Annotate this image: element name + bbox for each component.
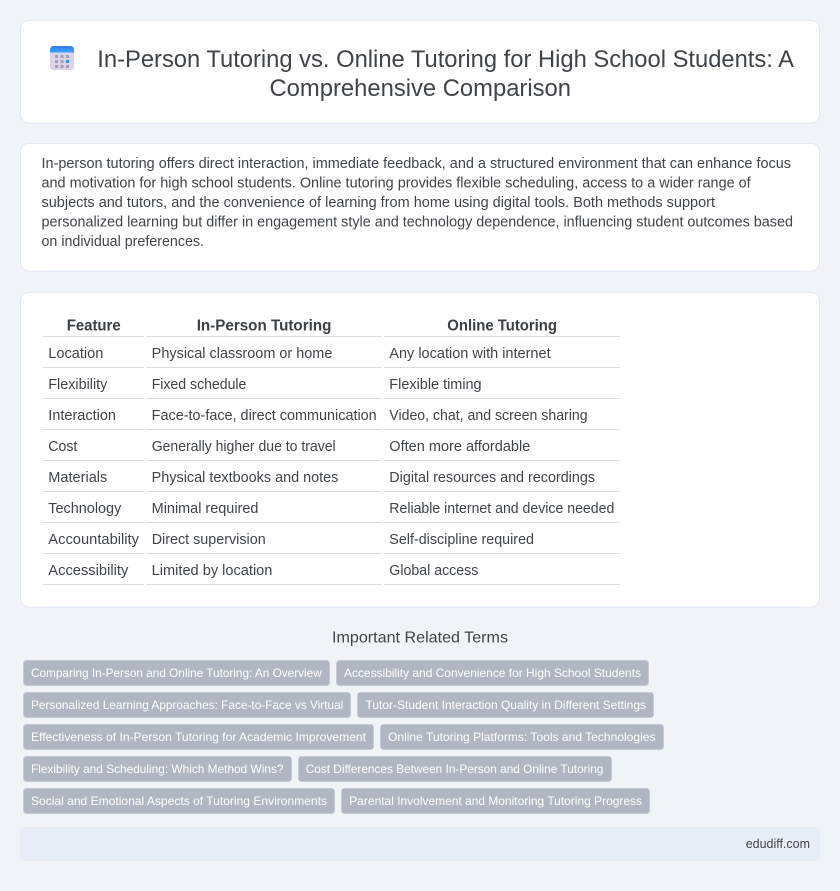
row: accountability: Self-discipline required — [389, 532, 534, 548]
row: materials — [48, 470, 595, 486]
panel: title header — [20, 20, 820, 123]
tag — [24, 660, 330, 686]
row: accessibility: Limited by location — [152, 563, 272, 579]
row: accountability — [48, 532, 534, 548]
title — [97, 46, 794, 102]
row: interaction: Interaction — [48, 408, 116, 424]
row: interaction: Video, chat, and screen sharing — [389, 408, 588, 424]
tag — [380, 724, 664, 750]
footer: edudiff.com — [746, 836, 810, 851]
row: interaction — [48, 408, 588, 424]
tag: Social and Emotional Aspects of Tutoring Environments — [31, 794, 327, 808]
tag: Effectiveness of In-Person Tutoring for Academic Improvement — [31, 730, 367, 744]
icon: calendar — [50, 46, 74, 70]
row: materials: Materials — [48, 470, 107, 486]
text block: introduction paragraph: and motivation for high school students. Online tutoring provides flexible scheduling, access to a wider range of — [42, 176, 752, 192]
tag: Comparing In-Person and Online Tutoring: An Overview — [31, 666, 322, 680]
tag: Tutor-Student Interaction Quality in Different Settings — [366, 698, 646, 712]
tag — [336, 660, 648, 686]
row: location: Location — [48, 346, 103, 362]
tag: Personalized Learning Approaches: Face-to-Face vs Virtual — [31, 698, 343, 712]
row: technology — [48, 501, 614, 517]
title: In-Person Tutoring vs. Online Tutoring for High School Students: A — [97, 46, 794, 73]
text block: introduction paragraph: personalized learning but differ in engagement style and technology dependence, influencing student outcomes based — [42, 214, 793, 230]
tag — [342, 788, 650, 814]
table header: Online Tutoring — [447, 318, 557, 335]
tag — [358, 692, 654, 718]
table header — [67, 318, 557, 335]
tag: Flexibility and Scheduling: Which Method Wins? — [31, 762, 284, 776]
tag: Cost Differences Between In-Person and Online Tutoring — [306, 762, 603, 776]
row: flexibility — [48, 377, 482, 393]
row: location: Any location with internet — [389, 346, 551, 362]
tag: Parental Involvement and Monitoring Tutoring Progress — [349, 794, 642, 808]
tag — [24, 724, 374, 750]
row: materials: Physical textbooks and notes — [152, 470, 338, 486]
row: interaction: Face-to-face, direct communication — [152, 408, 377, 424]
row: location — [48, 346, 551, 362]
text block: introduction paragraph — [42, 156, 793, 250]
row: flexibility: Fixed schedule — [152, 377, 246, 393]
tag: Accessibility and Convenience for High School Students — [344, 666, 641, 680]
text block: introduction paragraph: In-person tutoring offers direct interaction, immediate feedback, and a structured environment that can enhance focus — [42, 156, 791, 172]
table header: Feature — [67, 318, 121, 335]
row: cost — [48, 439, 530, 455]
row: cost: Cost — [48, 439, 77, 455]
row: accountability: Direct supervision — [152, 532, 266, 548]
row: materials: Digital resources and recordings — [389, 470, 595, 486]
tag: Online Tutoring Platforms: Tools and Technologies — [388, 730, 656, 744]
panel: introduction — [20, 144, 820, 271]
table header: In-Person Tutoring — [197, 318, 331, 335]
row: flexibility: Flexible timing — [389, 377, 482, 393]
text block: introduction paragraph: subjects and tutors, and the convenience of learning from home using digital tools. Both methods support — [42, 195, 715, 211]
row: flexibility: Flexibility — [48, 377, 108, 393]
tag — [24, 788, 334, 814]
text block: introduction paragraph: on individual preferences. — [42, 234, 204, 250]
heading: important related terms: Important Related Terms — [332, 630, 508, 647]
row: accessibility: Global access — [389, 563, 478, 579]
footer — [20, 827, 820, 861]
row: accountability: Accountability — [48, 532, 140, 548]
tag — [24, 692, 350, 718]
row: technology: Minimal required — [152, 501, 258, 517]
title: Comprehensive Comparison — [270, 75, 571, 102]
row: technology: Reliable internet and device needed — [389, 501, 614, 517]
tag — [24, 756, 292, 782]
row: accessibility — [48, 563, 478, 579]
row: accessibility: Accessibility — [48, 563, 129, 579]
panel: related term tags — [24, 660, 664, 814]
row: location: Physical classroom or home — [152, 346, 332, 362]
row: cost: Generally higher due to travel — [152, 439, 336, 455]
row: cost: Often more affordable — [389, 439, 530, 455]
row: technology: Technology — [48, 501, 122, 517]
panel: comparison table — [20, 292, 820, 607]
tag — [298, 756, 612, 782]
